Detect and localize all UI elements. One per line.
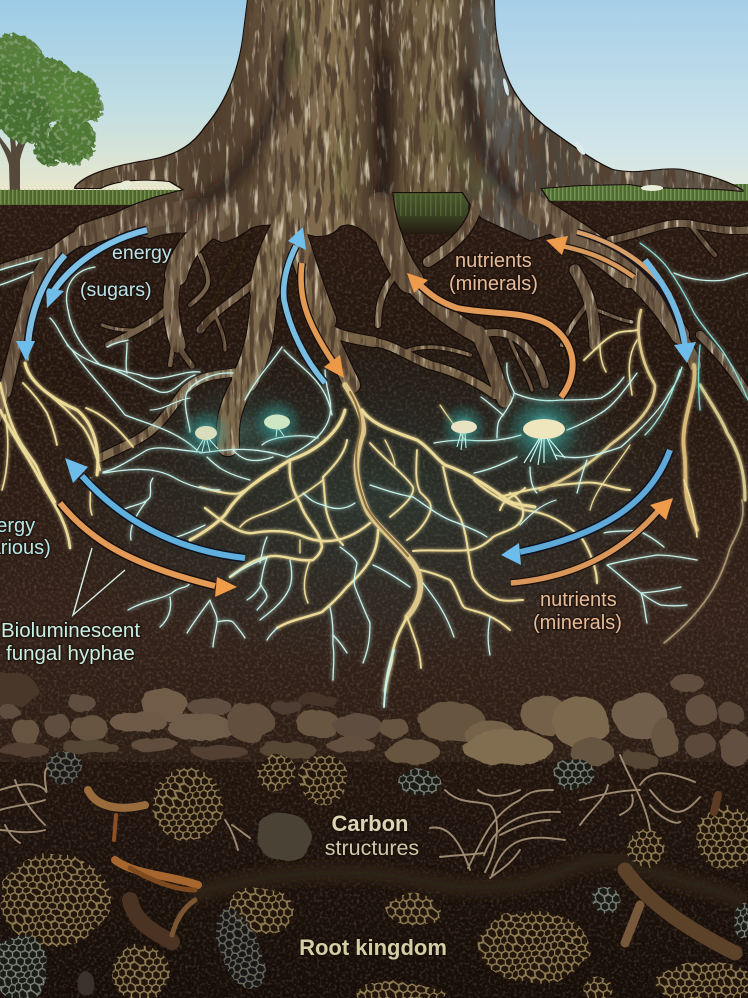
blue energy arrow: lower left: [65, 458, 245, 558]
orange nutrient arrow: lower right: [511, 498, 673, 583]
label: nutrients (minerals) upper: [449, 250, 538, 295]
label: Bioluminescent fungal hyphae: fungal hyphae: [6, 642, 135, 665]
label: Bioluminescent fungal hyphae: [1, 619, 140, 665]
root: far left main: [0, 208, 230, 420]
mushroom: glowing centre-right: [440, 403, 488, 451]
label: nutrients (minerals) upper: nutrients: [455, 250, 532, 272]
soil: lower carbon layer: [0, 762, 748, 998]
label: energy (various) cropped at left: [0, 515, 51, 559]
label: Bioluminescent fungal hyphae: Bioluminescent: [1, 619, 140, 642]
label: Carbon structures: [325, 811, 419, 860]
sky background: [0, 0, 748, 205]
label: energy (sugars): energy: [112, 242, 172, 264]
orange nutrient arrow: centre right loop: [407, 273, 573, 397]
root: mid right: [378, 205, 545, 400]
orange nutrient arrow: centre descending: [301, 263, 344, 378]
cyan bioluminescent fungal hyphae: [0, 243, 748, 707]
grass strip: [0, 184, 748, 234]
label: energy (sugars): [80, 242, 172, 301]
root: right main: [530, 205, 748, 395]
orange nutrient arrow: upper right: [546, 236, 634, 277]
trunk furrow shading and moss: [190, 8, 515, 330]
label: Carbon structures: structures: [325, 836, 419, 860]
blue energy arrow: upper left inner: [46, 230, 147, 308]
soil: root zone: [0, 198, 748, 770]
label: Root kingdom: Root kingdom: [299, 935, 447, 960]
label: energy (sugars): (sugars): [80, 279, 152, 301]
carbon structures: woody fragments: [88, 790, 735, 953]
mushroom: glowing centre-left: [252, 398, 302, 448]
root: centre leg: [295, 232, 495, 395]
sky gaps under the surface roots: [117, 78, 663, 191]
mushroom: large glowing: [508, 394, 580, 466]
small distant tree: [0, 34, 103, 198]
blue energy arrow: upper left outer: [16, 255, 65, 361]
tree trunk and buttress roots: [0, 0, 748, 458]
carbon structures: honeycomb fungal masses: [0, 749, 748, 998]
lighter soil seam between layers: [190, 859, 748, 905]
label: nutrients (minerals) lower: (minerals): [533, 612, 622, 634]
mushroom: glowing left: [180, 408, 232, 460]
blue energy arrow: centre rising: [284, 227, 325, 383]
label: nutrients (minerals) lower: nutrients: [540, 589, 617, 611]
yellow mycorrhizal root network: [0, 310, 745, 692]
callout lines to hyphae label: [73, 548, 125, 615]
label: nutrients (minerals) lower: [533, 589, 622, 634]
root: inner left: [102, 215, 255, 366]
teal haze around the glowing network: [35, 330, 715, 670]
orange nutrient arrow: lower left: [60, 503, 237, 597]
blue energy arrow: upper right: [577, 232, 696, 363]
stone layer: [0, 672, 748, 768]
blue energy arrow: lower right: [501, 450, 670, 565]
carbon structures: pale root twigs: [0, 755, 700, 878]
label: Carbon structures: Carbon: [332, 811, 408, 836]
root: centre-left leg: [100, 205, 305, 458]
label: nutrients (minerals) upper: (minerals): [449, 273, 538, 295]
